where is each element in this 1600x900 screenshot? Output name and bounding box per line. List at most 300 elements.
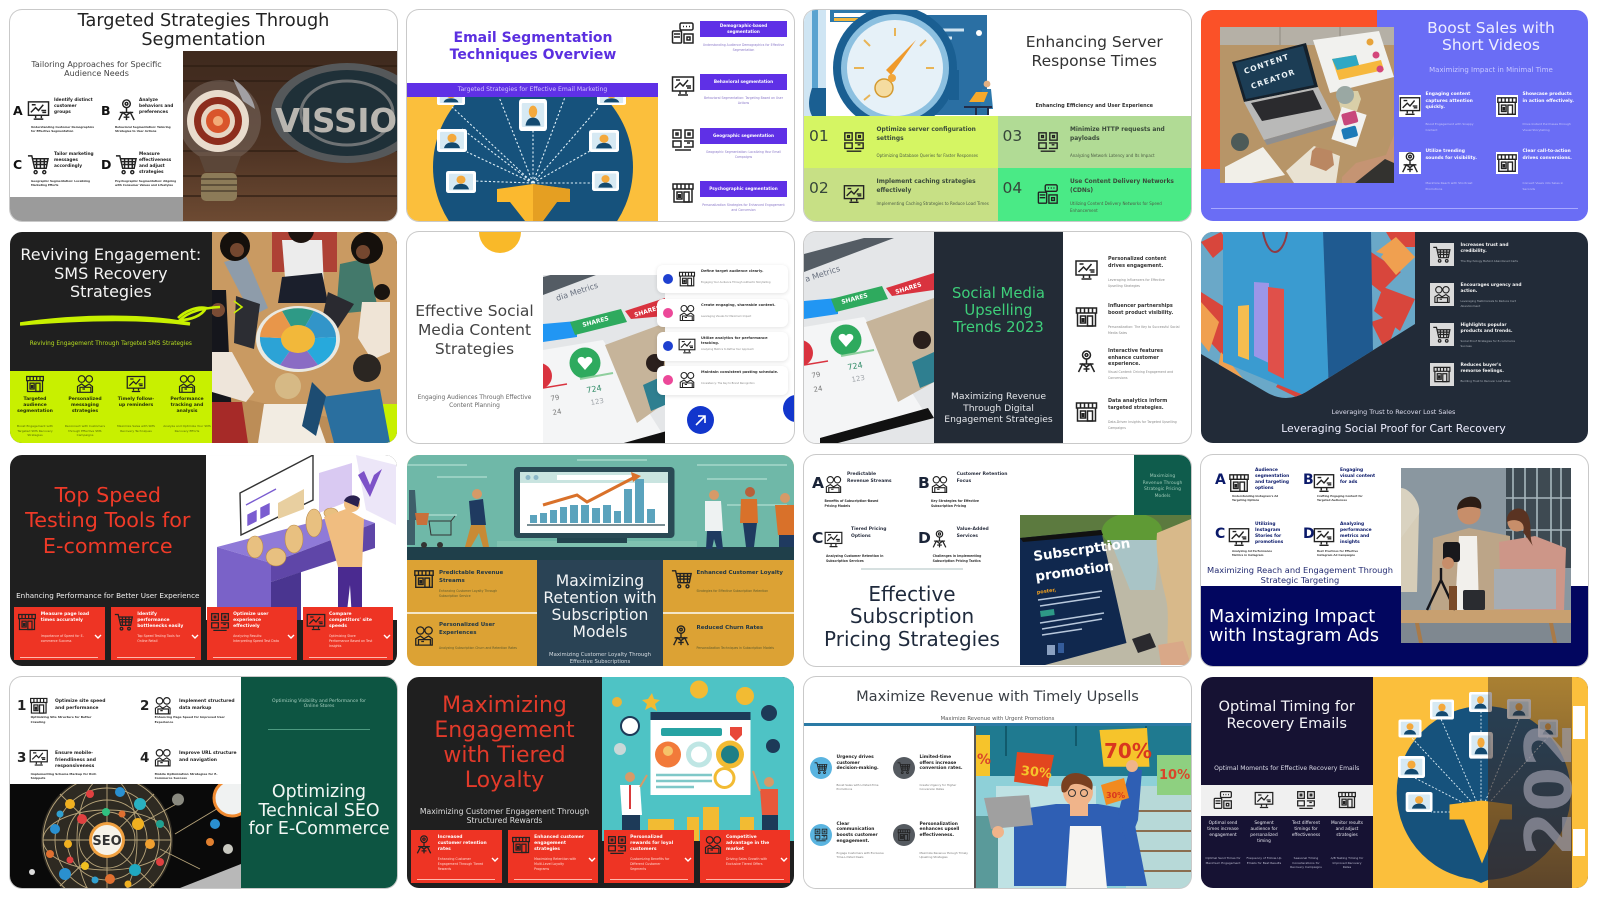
tile 4: Optimizing Store Performance Based on Test Insights [329,634,372,648]
item D: D [101,157,111,172]
panel: Email Segmentation Techniques Overview [407,10,794,221]
tile 2: Maximizing Retention with Multi-Level Loyalty Programs [534,857,576,871]
item 2 [663,560,794,610]
photo: social metrics screen [543,275,665,443]
column 3 [1288,821,1324,879]
item 1: Demographic-based [720,23,767,28]
item 3: Visual Content: Driving Engagement and Conversions [1108,370,1173,380]
item 3 [407,613,537,663]
item A: A [1215,472,1226,488]
item 01 [804,116,998,168]
icon: store [1337,790,1357,810]
item 4 [657,366,788,395]
item 02: Implement caching strategies effectively [876,179,976,194]
item 2: Limited-time offers increase conversion rates. [920,755,963,771]
subtitle: Enhancing Efficiency and User Experience [1035,103,1153,109]
illustration: audience funnel [407,97,658,221]
title: Short Videos [1442,36,1540,54]
item 3: Engage Customers with Exclusive Time-Limited Deals [836,851,884,859]
item A [1215,470,1295,504]
item D [918,529,1010,561]
title: E-commerce [43,534,173,558]
title: Maximize Revenue with Timely Upsells [856,688,1139,705]
item 01: Optimize server configuration settings [876,127,976,142]
item 4 [163,375,211,432]
item 1: Boost Engagement with Snappy Content [1426,122,1474,132]
item 1: Enhancing Customer Loyalty Through Subscription Service [439,589,497,598]
photo: social metrics screen: 79 [811,371,821,380]
photo: creators with camera [1400,468,1570,643]
photo: SEO network [10,784,241,888]
panel: Maximizing Engagement with Tiered Loyalty [407,677,794,888]
title: Optimizing [272,782,366,802]
tile 2 [111,607,201,660]
panel: Leveraging Social Proof for Cart Recovery [1201,232,1588,443]
item 3 [1399,148,1477,190]
item 1: Optimize site speed and performance [55,699,105,711]
centre panel with title [537,560,663,666]
item 4: Mobile Optimization Strategies for E-Commerce Success [155,772,218,780]
item 1 [1399,92,1474,132]
item 3: Maximize Sales with SMS Recovery Techniques [117,424,155,432]
title: Models [573,622,627,640]
item 4: Data-Driven Insights for Targeted Upselling Campaigns [1108,420,1177,430]
photo: excited shopper with sale signs: % [977,752,991,768]
column 4: Monitor results and adjust strategies [1331,821,1363,838]
item 1: Engaging Your Audience Through Authentic Storytelling [701,281,770,284]
item 2: Leveraging Testimonials to Reduce Cart Abandonment [1460,299,1516,308]
divider [663,612,794,614]
title: Upselling [964,302,1033,319]
item 1 [1075,256,1166,288]
item 4: Maximize Revenue through Timely Upselling Strategies [920,851,968,859]
item 3 [810,824,892,860]
item C [812,529,902,561]
photo: tablet with subscription promotion: promotion [1034,558,1115,585]
item 3: Maximize Reach with Shortcast Promotions [1426,181,1472,190]
title [1201,699,1372,732]
item A: Audience segmentation and targeting options [1255,468,1289,491]
tile 2 [508,830,598,883]
photo: excited shopper with sale signs: 30% [1020,764,1053,782]
tile 2: Enhanced customer engagement strategies [534,835,584,852]
item 3: Utilize analytics for performance tracking. [701,336,768,345]
item 2 [892,757,972,793]
item B: Analyze behaviors and preferences [139,98,173,115]
title: Effective Social [415,302,534,320]
item D [1303,524,1383,558]
icon: arrow button [687,406,714,434]
divider [861,568,963,570]
title [10,483,206,559]
title: for E-Commerce [248,819,390,839]
subtitle: Tailoring Approaches for Specific [31,60,162,69]
item 4: Reduced Churn Rates [696,625,763,631]
tile 3 [207,607,297,660]
item 2: Enhanced Customer Loyalty [696,570,783,576]
tile 2: Identify performance bottlenecks easily [137,612,183,629]
item 3: Geographic Segmentation: Localizing Your Email Campaigns [706,150,781,159]
panel: Enhancing Server Response Times [804,10,1191,221]
title [20,245,201,301]
divider [407,612,537,614]
title: Targeted Strategies Through [78,11,329,31]
item A: Benefits of Subscription-Based Pricing Models [824,499,878,508]
item 3: Highlights popular products and trends. [1460,323,1512,334]
item 3 [17,750,117,782]
panel: Targeted Strategies Through Segmentation [10,10,397,221]
illustration: audience funnel with year overlay: 202 [1512,723,1586,856]
icon: monitor [1254,790,1274,810]
panel: Top Speed Testing Tools for E-commerce [10,455,397,666]
item 1 [672,21,787,52]
title [1209,608,1399,645]
item 2: Strategies for Effective Subscription Retention [696,589,768,593]
item A: Understanding Instagram's Ad Targeting Options [1232,494,1278,502]
title: Retention with [543,588,657,606]
panel: Optimizing Technical SEO for E-Commerce [10,677,397,888]
item B: Key Strategies for Effective Subscription Pricing [931,499,979,508]
item A: A [812,474,824,492]
title [78,11,329,50]
subtitle: Maximizing Customer Engagement Through Structured Rewards [420,807,589,825]
item B: Engaging visual content for ads [1340,468,1375,485]
photo: social metrics screen: 79 [550,393,560,403]
tile 1: Measure page load times accurately [41,612,89,623]
item 1: Define target audience clearly. [701,269,763,273]
item A [812,474,902,506]
subtitle: Engaging Audiences Through Effective Content Planning [418,395,531,409]
column 2: Frequency of Follow-Up Emails for Best Results [1247,856,1281,865]
navy band [1201,586,1588,666]
item 1: segmentation [727,29,760,34]
tile 4 [700,830,790,883]
title: Maximizing [442,693,567,718]
item 2 [657,299,788,327]
panel: Effective Social Media Content Strategies [407,232,794,443]
item 4 [1430,363,1524,386]
title [537,572,663,640]
item C: C [13,157,22,172]
item D: Analyzing performance metrics and insights [1340,522,1372,545]
item C: Geographic Segmentation: Localizing Marketing Efforts [31,179,90,187]
photo: social metrics screen: a Metrics [804,264,841,284]
tile 1 [411,830,502,883]
photo: social metrics screen: SHARES [841,292,869,306]
item 2 [140,698,240,728]
item B: Customer Retention Focus [957,472,1007,484]
item 3: Personalized User Experiences [439,622,495,636]
item B: B [1303,472,1314,488]
title [804,583,1020,650]
item 03: Analyzing Network Latency and Its Impact [1070,153,1155,158]
photo: excited shopper with sale signs: 10% [1159,768,1190,783]
item 3: Utilize trending sounds for visibility. [1426,149,1477,161]
item 3: Analyzing Metrics to Refine Your Approach [701,348,754,351]
item A: Identify distinct customer groups [54,98,93,115]
divider band [804,723,1191,726]
item 4: Improve URL structure and navigation [179,751,237,763]
title: Subscription [850,604,974,628]
title: Maximizing [556,572,644,590]
item C: Tailor marketing messages accordingly [54,152,94,169]
tile 4: Compare competitors' site speeds [329,612,372,629]
item 04: Use Content Delivery Networks (CDNs) [1070,179,1174,194]
subtitle: Optimizing Visibility and Performance for Online Stores [272,699,366,709]
title: Boost Sales with [1427,19,1555,37]
subtitle: Maximize Revenue with Urgent Promotions [941,716,1054,722]
item 03: 03 [1002,127,1022,145]
item 4: Reduces buyer's remorse feelings. [1460,363,1504,374]
item B: B [918,474,930,492]
item 2: Create engaging, shareable content. [701,303,775,307]
column 3: Test different timings for effectiveness [1292,821,1320,838]
photo: social metrics screen: 24 [552,407,563,417]
subtitle: Maximizing Reach and Engagement Through Strategic Targeting [1207,565,1393,585]
item 4: Analyze and Optimize Your SMS Recovery Efforts [163,424,211,432]
item 3: 3 [17,750,26,766]
item 1: Leveraging Influencers for Effective Upselling Strategies [1108,278,1165,288]
column 1 [1205,821,1241,879]
panel: Maximizing Impact with Instagram Ads [1201,455,1588,666]
tile 1 [14,607,105,660]
title: Social Media [952,285,1045,302]
item 04: 04 [1002,179,1022,197]
column 1: Optimal send times increase engagement [1207,821,1239,838]
photo: tablet with subscription promotion: Subscrpttion [1032,536,1131,565]
title: Trends 2023 [953,319,1044,336]
photo: tablet with subscription promotion [1020,515,1191,665]
item 4: Personalization Techniques in Subscription Models [696,646,774,650]
tile 1: Importance of Speed for E-commerce Success [41,634,84,643]
panel: Effective Subscription Pricing Strategies [804,455,1191,666]
photo: social metrics screen: 123 [590,397,605,407]
item 1: Optimizing Site Structure for Better Crawling [31,715,91,724]
photo: social metrics screen: dia Metrics [555,281,599,303]
item D: Best Practices for Effective Instagram Ad Campaigns [1317,548,1358,556]
item 4 [1076,398,1177,430]
column 1: Optimal Send Times for Maximum Engagement [1205,856,1241,865]
subtitle: Enhancing Performance for Better User Experience [16,590,199,600]
item A: Predictable Revenue Streams [847,472,892,484]
title [1427,19,1555,54]
item B [1303,470,1383,504]
photo: excited shopper with sale signs: 70% [1104,739,1152,763]
icon: grid [1296,790,1316,810]
tile 3: Customizing Benefits for Different Customer Segments [630,857,669,871]
item 02: Implementing Caching Strategies to Reduce Load Times [876,201,989,206]
item C [1215,524,1295,558]
item 3: Timely follow-up reminders [118,397,154,408]
footer band [10,197,183,221]
item 2: Personalized messaging strategies [68,397,102,414]
panel: Boost Sales with Short Videos [1201,10,1588,221]
photo: group circle around wheel [212,232,397,443]
column 3: Seasonal Timing Considerations for Recovery Campaigns [1290,856,1322,869]
item B [918,474,1010,506]
photo: social metrics screen [804,232,934,443]
item 2: Behavioral segmentation [714,79,773,84]
tile 4 [302,607,393,660]
green subtitle box: Maximizing Revenue Through Strategic Pricing Models [1143,474,1182,498]
subtitle band [407,83,658,97]
item 1 [407,560,537,610]
title [952,285,1045,336]
item 3: Geographic segmentation [713,133,774,138]
item 02: 02 [809,179,829,197]
title [415,302,534,358]
title: Effective [868,582,956,606]
item 1: Engaging content captures attention quickly. [1426,92,1473,110]
photo: content creator desk: CONTENT [1243,52,1290,76]
item 1: The Psychology Behind Abandoned Carts [1460,259,1518,263]
item 4: Convert Views into Sales in Seconds [1522,181,1563,190]
item 2: Enhancing Page Speed for Improved User Experience [155,715,225,724]
title: Recovery Emails [1227,715,1347,732]
item 4 [663,613,794,663]
title: Maximizing Impact [1209,607,1375,627]
icon: hand-drawn highlighter stroke and arrow [20,300,244,326]
panel: Optimal Timing for Recovery Emails [1201,677,1588,888]
item 1 [17,698,117,728]
photo: social metrics screen: SHARES [895,282,922,296]
item 4: Building Trust to Recover Lost Sales [1460,379,1510,383]
title: Subscription [552,606,648,624]
subtitle: Reviving Engagement Through Targeted SMS Strategies [30,341,192,347]
item 1 [1430,242,1518,266]
item 2 [672,74,787,105]
tile 3: Optimize user experience effectively [233,612,268,629]
item 04 [998,168,1191,221]
item 3 [672,128,787,159]
item 4: 4 [140,750,149,766]
item 4: Data analytics inform targeted strategies. [1108,398,1167,411]
tile 1: Enhancing Customer Engagement Through Tiered Rewards [438,857,483,871]
decorative yellow circle [479,211,521,253]
title: Optimal Timing for [1219,698,1355,715]
tile 3 [604,830,694,883]
item 1 [657,265,788,293]
title: Pricing Strategies [824,627,1000,651]
item 3: Ensure mobile-friendliness and responsiveness [55,751,96,769]
item 2 [1076,303,1180,335]
item 1: Targeted audience segmentation [17,397,53,414]
column 2: Segment audience for personalized timing [1250,821,1278,844]
photo: social metrics screen: 724 [586,383,602,395]
item B: Behavioral Segmentation: Tailoring Strategies to User Actions [115,125,171,133]
item 1: Personalized content drives engagement. [1108,256,1166,269]
item D: D [1303,526,1315,542]
item 4: Personalization Strategies for Enhanced Engagement and Conversion [702,203,785,212]
title: Strategies [435,340,514,358]
item 3 [1078,348,1173,380]
tile 2: Top Speed Testing Tools for Online Retail [137,634,180,643]
title: Email Segmentation [454,30,612,46]
dark centre panel [934,232,1063,443]
item 2: Reconnect with Customers through Effective SMS Campaigns [65,424,105,437]
item 3: Social Proof Strategies for E-commerce Success [1460,339,1515,348]
item B [101,98,173,133]
subtitle: Optimal Moments for Effective Recovery Emails [1214,765,1359,772]
tile 1: Increased customer retention rates [438,835,487,852]
item D: D [918,529,931,547]
left panel background [804,726,972,888]
title: Strategies [70,282,152,301]
tile 3: Personalized rewards for loyal customers [630,835,673,852]
item 2: 2 [140,698,149,714]
item 2: Encourages urgency and action. [1460,283,1522,294]
icon: blue button at edge [783,395,809,422]
item 2: Implement structured data markup [179,699,235,711]
photo: social metrics screen: 724 [847,361,863,372]
item 2: Personalization: The Key to Successful Social Media Sales [1108,325,1180,335]
item 1: Urgency drives customer decision-making. [836,755,879,771]
green subtitle box [1134,455,1191,515]
title: Loyalty [465,768,544,793]
photo: content creator desk [1220,27,1394,183]
item 3 [657,332,788,361]
footer rule [1211,208,1578,209]
item 3: Interactive features enhance customer experience. [1108,348,1163,367]
title: with Tiered [443,743,566,768]
item C [13,152,94,187]
subtitle band: Targeted Strategies for Effective Email Marketing [458,86,607,93]
item 4: Psychographic segmentation [709,186,778,191]
item 3: Implementing Schema Markup for Rich Snippets [31,772,96,780]
item C: C [812,529,823,547]
item 1: 1 [17,698,26,714]
illustration: loyalty dashboard [602,677,794,841]
title: Techniques Overview [450,46,616,62]
photo: social metrics screen: 24 [813,385,824,394]
green panel [241,677,397,888]
item D: Challenges in Implementing Subscription Pricing Tactics [933,554,981,563]
panel: Maximizing Retention with Subscription Models [407,455,794,666]
subtitle: Maximizing Customer Loyalty Through Effective Subscriptions [549,652,651,664]
item C: Analyzing Customer Retention in Subscription Services [826,554,883,563]
item 3 [1430,322,1515,348]
item 2: Showcase products in action effectively. [1522,92,1574,104]
item 4: Clear call-to-action drives conversions. [1522,149,1572,161]
item 4: Personalization enhances upsell effectiveness. [920,822,959,838]
item 03: Minimize HTTP requests and payloads [1070,127,1165,142]
item A: Understanding Customer Demographics for Effective Segmentation [31,125,94,133]
item 4: Performance tracking and analysis [170,397,204,414]
item 1: Increases trust and credibility. [1460,243,1509,254]
item 01: Optimizing Database Queries for Faster Responses [876,153,978,158]
subtitle: Maximizing Impact in Minimal Time [1429,66,1553,74]
tile 4: Driving Sales Growth with Exclusive Tiered Offers [726,857,767,866]
column 4 [1329,821,1365,879]
photo: content creator desk: CREATOR [1250,67,1297,91]
item 2: Create Urgency for Higher Conversion Rates [920,783,956,791]
item 4 [672,181,787,212]
item 2: Influencer partnerships boost product visibility. [1108,303,1173,316]
panel: Social Media Upselling Trends 2023 [804,232,1191,443]
title: Engagement [434,718,575,743]
item C: Utilizing Instagram Stories for promotions [1255,522,1283,545]
item 2: Leveraging Visuals for Maximum Impact [701,315,751,318]
item 2 [1496,92,1574,132]
icon: devices [1213,790,1233,810]
item 2: Behavioral Segmentation: Targeting Based on User Actions [704,96,783,105]
column 2 [1246,821,1282,879]
title: SMS Recovery [54,264,168,283]
item 1 [17,376,53,437]
photo: tablet with subscription promotion: poster, [1036,587,1057,596]
item A [13,98,94,133]
tile 4: Competitive advantage in the market [726,835,769,852]
